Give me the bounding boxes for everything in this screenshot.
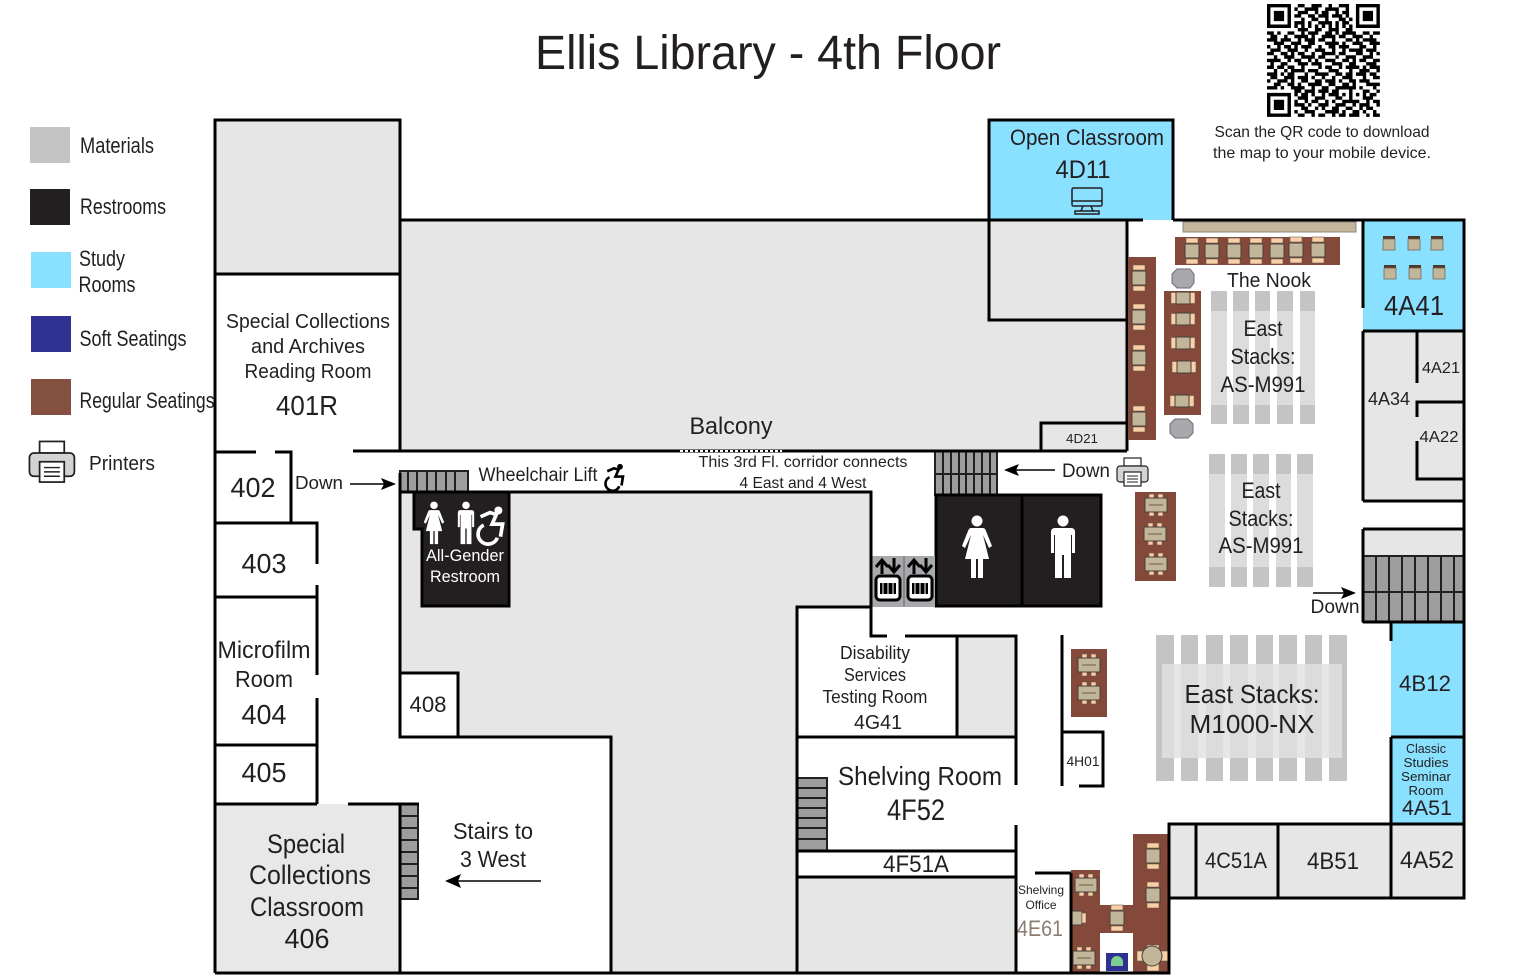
women's restroom (936, 495, 1022, 606)
label: microfilm room: Microfilm (218, 637, 310, 664)
arrow: down south east (1313, 587, 1356, 599)
label: stairs to 3 west: 3 West (460, 846, 527, 872)
legend: printers: Printers (89, 453, 155, 475)
elevators (871, 556, 935, 607)
label: special collections classroom: 406 (284, 923, 330, 954)
label: special collections classroom: Classroom (250, 892, 364, 922)
room fills: study rooms (989, 120, 1464, 824)
seating: nook row (1175, 237, 1340, 265)
arrow: down west (350, 478, 396, 490)
east stacks lower (1156, 635, 1347, 781)
label: shelving office: Shelving (1018, 883, 1064, 897)
all-gender restroom: All-Gender (426, 546, 504, 565)
QR code (1267, 6, 1380, 115)
label: 4A41: 4A41 (1384, 290, 1444, 321)
QR caption: Scan the QR code to download (1214, 124, 1430, 141)
label: classic studies seminar room: Seminar (1401, 769, 1452, 784)
east stacks upper: AS-M991 (1220, 372, 1306, 397)
east stacks upper: East (1244, 316, 1282, 341)
east stacks lower: East Stacks: (1184, 679, 1320, 709)
walls (215, 120, 1464, 973)
label: reading room: 401R (276, 390, 338, 421)
icon: wheelchair (605, 464, 623, 491)
east stacks lower: M1000-NX (1190, 709, 1314, 739)
label: 4F51A: 4F51A (883, 851, 949, 878)
label: open classroom: Open Classroom (1010, 125, 1164, 150)
label: microfilm room: 404 (242, 699, 286, 730)
label: down east: Down (1062, 461, 1110, 482)
seating: tables by 4H01 (1071, 649, 1107, 717)
label: microfilm room: Room (235, 666, 293, 692)
legend: printers (29, 441, 155, 482)
label: 4A34: 4A34 (1368, 389, 1410, 409)
label: testing room: 4G41 (854, 712, 902, 734)
arrow: down east (1004, 464, 1055, 476)
label: 4H01: 4H01 (1066, 753, 1100, 769)
label: corridor note: This 3rd Fl. corridor connects (698, 454, 908, 471)
label: 405: 405 (242, 757, 286, 788)
east stacks middle: AS-M991 (1218, 533, 1304, 558)
label: 4B12: 4B12 (1399, 671, 1451, 696)
label: classic studies seminar room: Studies (1404, 755, 1449, 770)
label: 4B51: 4B51 (1307, 848, 1359, 875)
label: stairs to 3 west (453, 818, 533, 872)
legend: restrooms: Restrooms (80, 194, 166, 219)
label: the nook: The Nook (1227, 270, 1312, 292)
legend (29, 127, 215, 482)
all-gender restroom: Restroom (430, 567, 500, 586)
legend: regular seatings: Regular Seatings (80, 388, 214, 413)
label: down west: Down (295, 473, 343, 493)
label: 402: 402 (230, 472, 276, 503)
east stacks middle (1209, 454, 1313, 587)
label: 4D21: 4D21 (1066, 431, 1098, 446)
legend: materials (30, 127, 154, 163)
label: reading room: Reading Room (244, 361, 372, 383)
label: special collections classroom (249, 829, 371, 954)
floor fills (215, 120, 1464, 973)
label: 403: 403 (242, 548, 286, 579)
label: shelving office: Office (1026, 898, 1057, 912)
icon: printer (1117, 458, 1148, 486)
seating: tables by east stacks (1135, 492, 1176, 581)
label: 4A22: 4A22 (1420, 429, 1459, 446)
label: classic studies seminar room: Classic (1406, 741, 1446, 756)
label: classic studies seminar room: 4A51 (1402, 797, 1452, 820)
stools (1170, 269, 1194, 438)
east stacks upper: Stacks: (1230, 344, 1296, 369)
label: microfilm room (218, 637, 310, 730)
label: open classroom: 4D11 (1056, 156, 1110, 184)
QR caption: the map to your mobile device. (1213, 145, 1431, 162)
study desks in 4A41 (1383, 236, 1445, 279)
label: testing room (822, 643, 928, 734)
seating: left strip (1128, 257, 1156, 440)
label: shelving office (1017, 883, 1064, 941)
label: classic studies seminar room (1401, 741, 1452, 820)
label: testing room: Services (844, 665, 906, 685)
label: balcony: Balcony (690, 413, 772, 440)
label: special collections classroom: Special (267, 829, 345, 859)
legend: study rooms (31, 246, 136, 297)
label: shelving room: 4F52 (887, 794, 945, 827)
balcony dotted railing (680, 450, 782, 452)
label: special collections classroom: Collections (249, 860, 371, 890)
legend: study rooms: Rooms (78, 272, 136, 297)
label: reading room: Special Collections (226, 311, 390, 333)
label: corridor note (698, 454, 908, 492)
east stacks middle: East (1242, 478, 1280, 503)
legend: regular seatings (31, 379, 214, 415)
label: down south east: Down (1310, 597, 1360, 618)
label: 408: 408 (410, 692, 446, 717)
label: stairs to 3 west: Stairs to (453, 818, 533, 844)
east stacks upper (1211, 291, 1315, 424)
label: 4A21: 4A21 (1422, 360, 1460, 377)
label: corridor note: 4 East and 4 West (740, 475, 867, 492)
seating: bottom cluster (1071, 824, 1169, 973)
label: testing room: Testing Room (822, 687, 928, 707)
label: open classroom (1010, 125, 1164, 184)
icon: monitor (1072, 188, 1102, 214)
label: shelving room: Shelving Room (838, 761, 1002, 791)
label: reading room (226, 311, 390, 421)
stairs (400, 451, 1464, 899)
QR caption (1213, 124, 1431, 162)
label: testing room: Disability (840, 643, 910, 663)
label: reading room: and Archives (251, 336, 365, 358)
title: Ellis Library - 4th Floor (535, 27, 1001, 80)
legend: soft seatings: Soft Seatings (80, 326, 186, 351)
label: 4C51A: 4C51A (1205, 848, 1267, 873)
legend: study rooms: Study (79, 246, 125, 271)
all-gender restroom (414, 492, 509, 606)
label: wheelchair lift: Wheelchair Lift (478, 465, 598, 486)
legend: materials: Materials (80, 133, 154, 158)
legend: soft seatings (31, 316, 186, 352)
nook counter (1183, 222, 1356, 232)
arrow: stairs to 3 west (445, 874, 541, 888)
label: shelving office: 4E61 (1017, 916, 1063, 941)
label: classic studies seminar room: Room (1408, 783, 1444, 798)
seating: middle strip (1164, 291, 1201, 415)
legend: restrooms (30, 189, 166, 225)
east stacks middle: Stacks: (1228, 506, 1294, 531)
label: 4A52: 4A52 (1400, 847, 1454, 874)
men's restroom (1022, 495, 1101, 606)
label: shelving room (838, 761, 1002, 827)
